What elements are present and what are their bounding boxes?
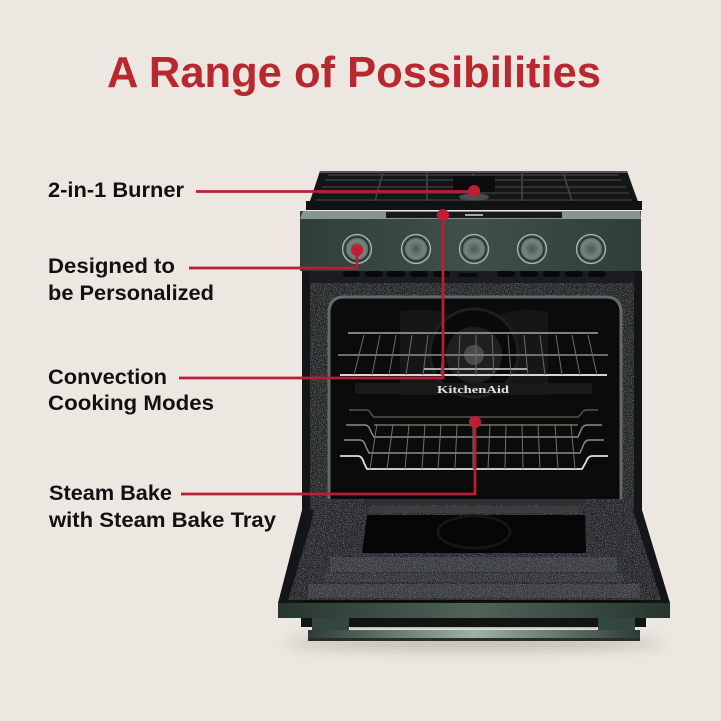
callout: Convection Cooking Modes: Cooking Modes bbox=[48, 391, 214, 415]
floor shadow bbox=[284, 636, 664, 650]
lower rack bbox=[340, 410, 608, 469]
door hinge bar bbox=[364, 499, 585, 505]
display strip bbox=[386, 212, 562, 218]
callout: Designed to be Personalized: be Personalized bbox=[48, 281, 214, 305]
upper rack bbox=[338, 333, 608, 375]
vent slots bbox=[343, 271, 606, 277]
oven range illustration bbox=[278, 171, 670, 650]
control panel bbox=[300, 211, 641, 271]
cooktop with grates bbox=[306, 171, 642, 210]
door window bbox=[362, 515, 586, 553]
oven cavity bbox=[329, 297, 621, 505]
callout: 2-in-1 Burner bbox=[48, 178, 480, 202]
callout: Steam Bake with Steam Bake Tray: with Steam Bake Tray bbox=[48, 508, 276, 532]
knobs bbox=[342, 234, 606, 264]
callout: Steam Bake with Steam Bake Tray: Steam Bake bbox=[49, 481, 172, 505]
callout: Designed to be Personalized bbox=[48, 244, 363, 305]
oven body bbox=[302, 271, 642, 526]
door front and handle bbox=[278, 603, 670, 641]
callout: Convection Cooking Modes bbox=[48, 209, 449, 415]
open oven door bbox=[278, 499, 670, 603]
callout: 2-in-1 Burner: 2-in-1 Burner bbox=[48, 178, 185, 202]
KitchenAid brand bar bbox=[355, 383, 592, 396]
callout: Convection Cooking Modes: Convection bbox=[48, 365, 167, 389]
callout: Steam Bake with Steam Bake Tray bbox=[48, 416, 481, 532]
door steps bbox=[330, 557, 617, 572]
KitchenAid brand bar: KitchenAid bbox=[437, 384, 509, 396]
convection fan bbox=[400, 309, 548, 397]
callout: Designed to be Personalized: Designed to bbox=[48, 254, 175, 278]
title: A Range of Possibilities bbox=[107, 48, 601, 97]
